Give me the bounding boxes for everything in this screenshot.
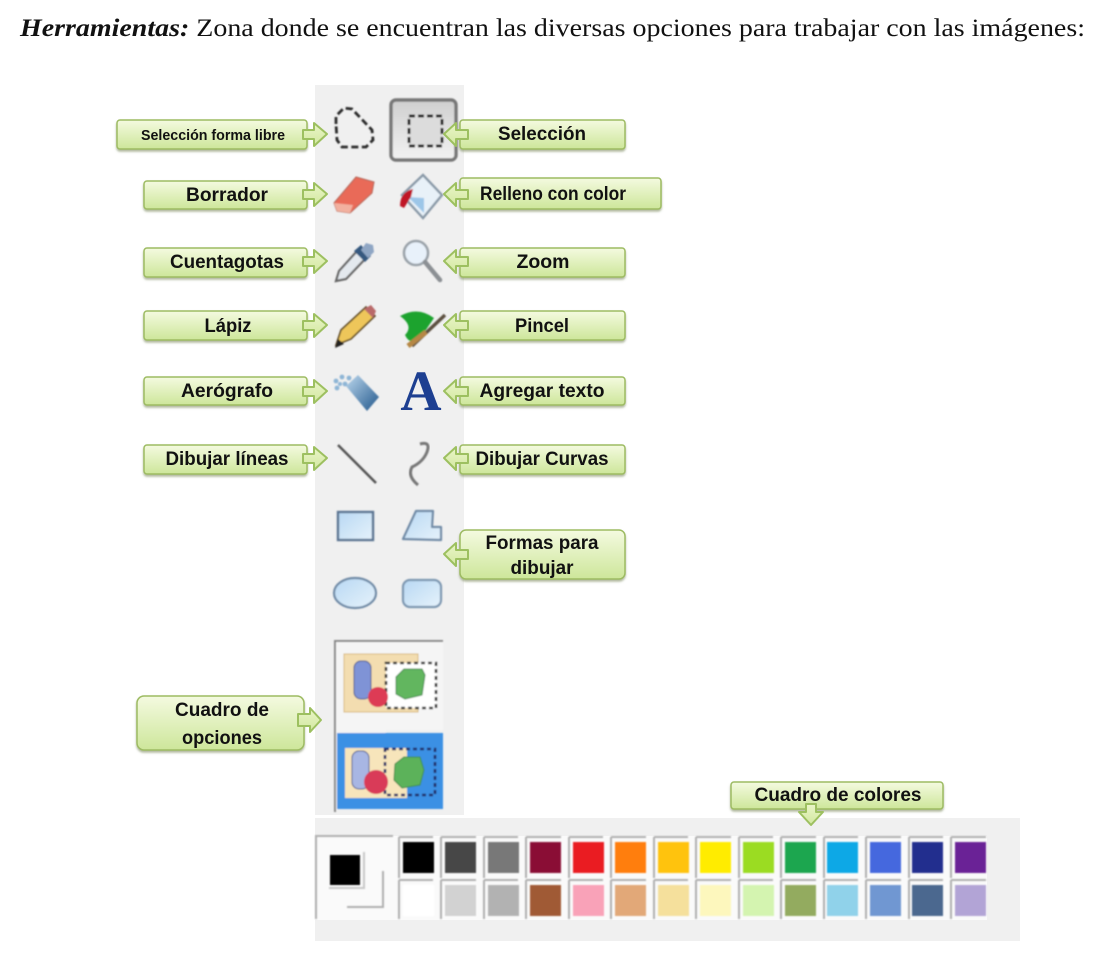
icon: pencil <box>335 305 376 348</box>
callout: Cuentagotas <box>144 248 327 277</box>
panel: colour box <box>315 818 1020 941</box>
callout: Formas para dibujar: Formas para <box>486 533 599 554</box>
callout: Aerógrafo: Aerógrafo <box>181 381 273 402</box>
current colour selector <box>316 836 393 919</box>
options box <box>335 641 443 812</box>
callout: Relleno con color <box>444 178 661 209</box>
heading: Herramientas: Zona donde se encuentran las diversas opciones para trabajar con las imágenes: <box>19 15 1085 42</box>
callout: Relleno con color: Relleno con color <box>480 184 627 205</box>
callout: Pincel <box>444 311 625 340</box>
callout: Dibujar Curvas: Dibujar Curvas <box>476 449 608 470</box>
icon: eraser <box>334 177 374 213</box>
callout: Formas para dibujar <box>444 530 625 579</box>
icon: airbrush <box>334 375 379 411</box>
icon: line tool <box>338 445 376 483</box>
icon: curve tool <box>410 443 428 485</box>
icon: rounded rectangle shape <box>403 580 441 607</box>
callout: Pincel: Pincel <box>515 316 569 337</box>
panel: toolbar <box>315 85 464 815</box>
callout: Dibujar Curvas <box>444 445 625 474</box>
icon: rectangle shape <box>338 512 373 540</box>
callout: Agregar texto <box>444 377 625 405</box>
callout: Dibujar líneas <box>144 445 327 474</box>
callout: Zoom: Zoom <box>516 252 570 273</box>
callout: Cuentagotas: Cuentagotas <box>170 252 284 273</box>
callout: Agregar texto: Agregar texto <box>480 381 604 402</box>
callout: Cuadro de opciones <box>137 696 321 750</box>
callout: Lápiz: Lápiz <box>204 316 252 337</box>
callout: Selección forma libre <box>117 120 327 149</box>
callout: Cuadro de opciones: Cuadro de <box>175 700 269 721</box>
callout: Borrador: Borrador <box>186 185 269 206</box>
callout: Selección forma libre: Selección forma libre <box>141 128 285 144</box>
callout: Zoom <box>444 248 625 277</box>
icon: free-form selection <box>336 108 373 147</box>
icon: polygon shape <box>403 511 441 540</box>
callout: Borrador <box>144 181 327 209</box>
callout: Selección: Selección <box>498 124 586 145</box>
icon: brush <box>400 311 445 346</box>
icon: opaque option <box>344 654 436 712</box>
callout: Cuadro de colores: Cuadro de colores <box>754 785 922 806</box>
icon: magnifier <box>404 241 440 280</box>
callout: Selección <box>444 120 625 149</box>
callout: Cuadro de colores <box>731 782 943 825</box>
icon: selection button <box>391 100 456 160</box>
icon: transparent option <box>345 748 435 798</box>
icon: text tool: A <box>400 360 442 423</box>
icon: eyedropper <box>336 243 374 281</box>
icon: ellipse shape <box>334 578 376 608</box>
callout: Dibujar líneas: Dibujar líneas <box>166 449 288 470</box>
callout: Lápiz <box>144 311 327 340</box>
callout: Cuadro de opciones: opciones <box>182 728 262 749</box>
callout: Aerógrafo <box>144 377 327 405</box>
colour swatches <box>399 837 986 919</box>
callout: Formas para dibujar: dibujar <box>510 558 574 579</box>
icon: fill bucket <box>400 175 442 218</box>
